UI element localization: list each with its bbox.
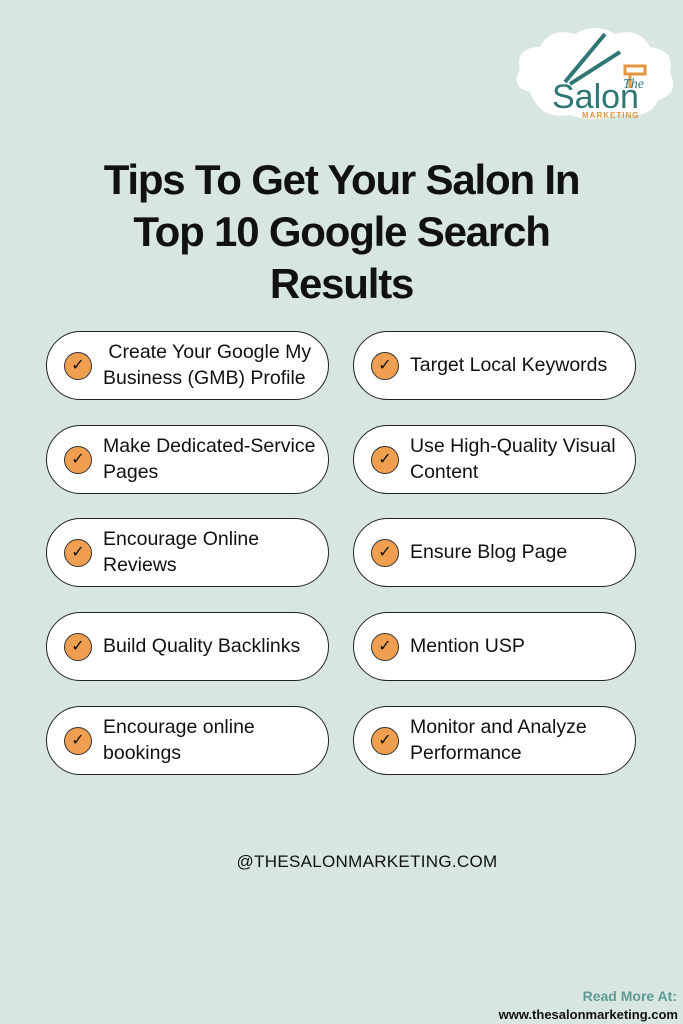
read more: Read More At: bbox=[583, 988, 677, 1004]
pill: 9 bbox=[46, 706, 329, 775]
logo: MARKETING bbox=[582, 111, 639, 120]
pill: 10: ✓ bbox=[378, 732, 392, 749]
pill: 8: ✓ bbox=[378, 638, 392, 655]
pill: 10: Performance bbox=[410, 742, 522, 764]
logo: The bbox=[623, 77, 644, 92]
pill: 3: Make Dedicated-Service bbox=[103, 435, 315, 457]
pill: 3: ✓ bbox=[71, 451, 85, 468]
pill: 9: Encourage online bbox=[103, 716, 255, 738]
pill: 9: bookings bbox=[103, 742, 181, 764]
pill: 9: ✓ bbox=[71, 732, 85, 749]
pill: 4: ✓ bbox=[378, 451, 392, 468]
pill: 8: Mention USP bbox=[410, 635, 525, 657]
pill: 2: Target Local Keywords bbox=[410, 354, 607, 376]
pill: 5 bbox=[46, 518, 329, 587]
title: Results bbox=[270, 260, 413, 307]
pill: 5: Encourage Online bbox=[103, 528, 259, 550]
pill: 5: Reviews bbox=[103, 554, 177, 576]
pill: 10 bbox=[353, 706, 636, 775]
pill: 7: ✓ bbox=[71, 638, 85, 655]
pill: 1 bbox=[46, 331, 329, 400]
pill: 6 bbox=[353, 518, 636, 587]
pill: 8 bbox=[353, 612, 636, 681]
title bbox=[104, 156, 579, 307]
logo: Salon bbox=[552, 78, 639, 116]
pill: 1: ✓ bbox=[71, 357, 85, 374]
pill: 6: Ensure Blog Page bbox=[410, 541, 567, 563]
pill: 10: Monitor and Analyze bbox=[410, 716, 587, 738]
pill: 1: Business (GMB) Profile bbox=[103, 367, 306, 389]
pill: 5: ✓ bbox=[71, 544, 85, 561]
website: www.thesalonmarketing.com bbox=[499, 1007, 678, 1022]
pill: 2: ✓ bbox=[378, 357, 392, 374]
pill: 4: Use High-Quality Visual bbox=[410, 435, 616, 457]
title: Tips To Get Your Salon In bbox=[104, 156, 579, 203]
pill: 2 bbox=[353, 331, 636, 400]
pill: 3: Pages bbox=[103, 461, 158, 483]
logo bbox=[516, 28, 674, 120]
handle text: @THESALONMARKETING.COM bbox=[237, 852, 497, 871]
title: Top 10 Google Search bbox=[133, 208, 550, 255]
pill: 3 bbox=[46, 425, 329, 494]
pill: 6: ✓ bbox=[378, 544, 392, 561]
pill: 1: Create Your Google My bbox=[108, 341, 311, 363]
pill: 7 bbox=[46, 612, 329, 681]
pill: 4 bbox=[353, 425, 636, 494]
pill: 4: Content bbox=[410, 461, 478, 483]
pill: 7: Build Quality Backlinks bbox=[103, 635, 300, 657]
